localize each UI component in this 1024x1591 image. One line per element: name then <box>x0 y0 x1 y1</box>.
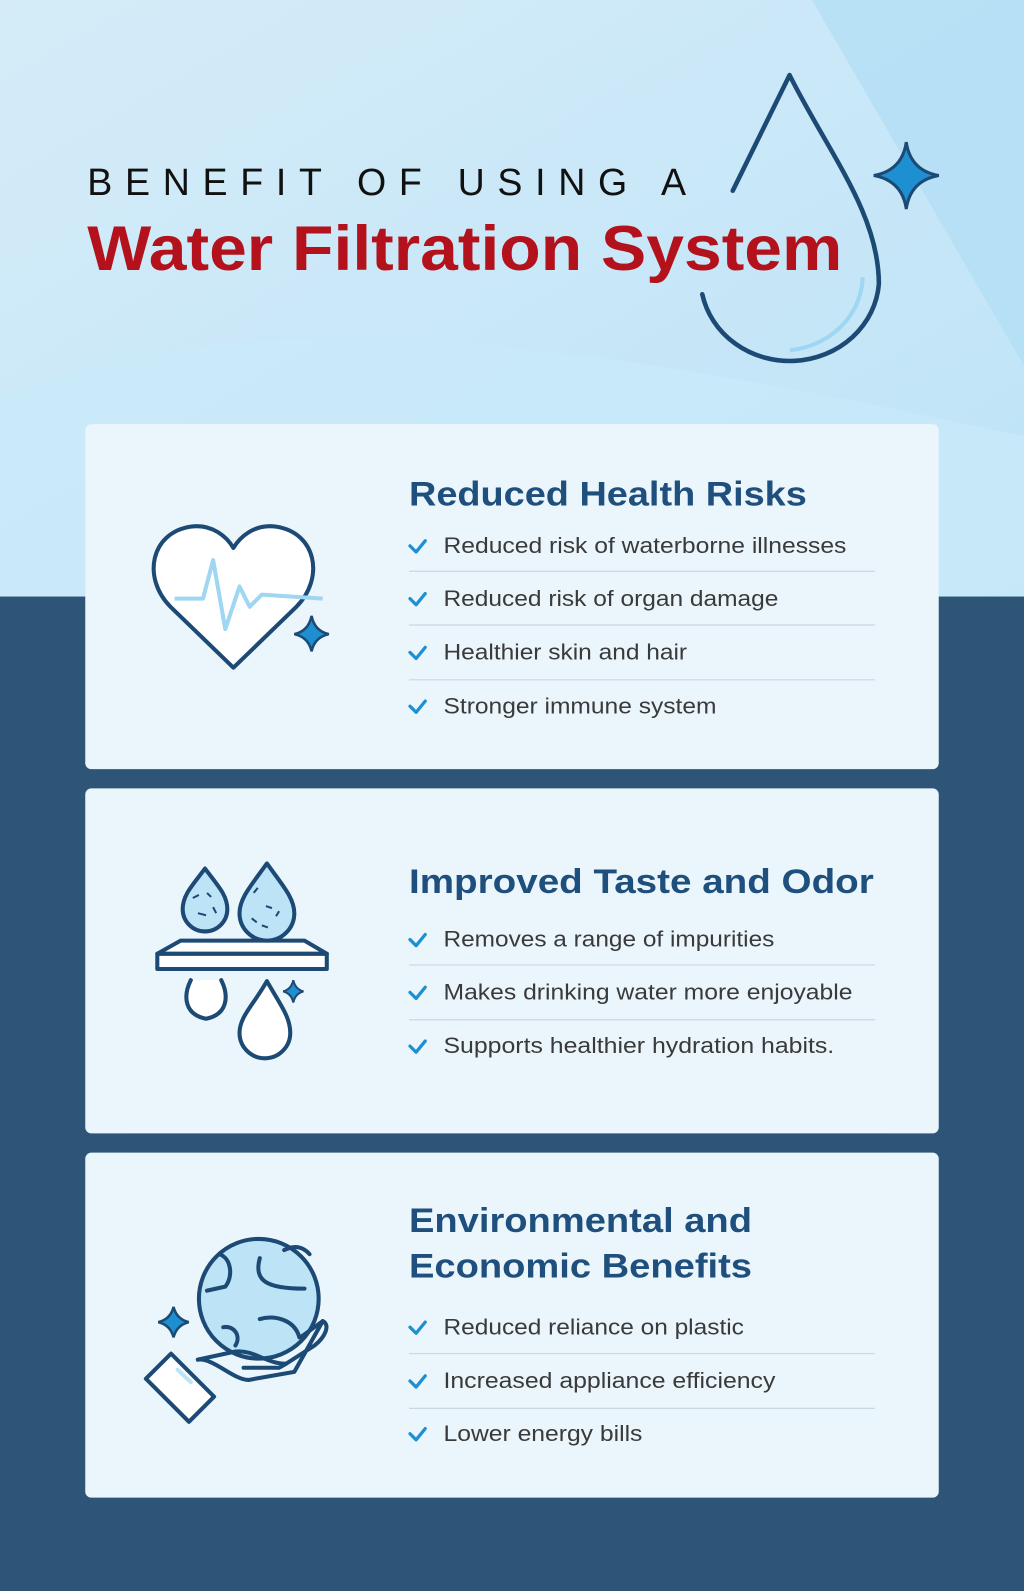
title: Water Filtration System <box>87 214 842 284</box>
list: Supports healthier hydration habits. <box>443 1033 834 1058</box>
list: Reduced risk of waterborne illnesses <box>443 533 846 558</box>
panel: taste and odor <box>85 788 939 1133</box>
icon: heart <box>154 526 329 668</box>
background top <box>0 0 1024 597</box>
panel: environmental: Economic Benefits <box>409 1247 752 1285</box>
list <box>409 927 875 1058</box>
icon: filter drops <box>157 863 327 1058</box>
panel: environmental <box>85 1153 939 1498</box>
list: Stronger immune system <box>443 693 716 718</box>
list: Removes a range of impurities <box>443 927 774 952</box>
list <box>409 1314 875 1446</box>
panel: health risks <box>85 424 939 769</box>
icon: water drop <box>702 75 939 361</box>
list: Lower energy bills <box>443 1421 643 1446</box>
list: Reduced risk of organ damage <box>443 586 778 611</box>
background bottom <box>0 597 1024 1591</box>
title: BENEFIT OF USING A <box>87 161 700 203</box>
list: Makes drinking water more enjoyable <box>443 979 852 1004</box>
heading: Reduced Health Risks <box>409 475 807 513</box>
icon: globe in hand <box>146 1239 326 1422</box>
heading: Environmental and <box>409 1202 752 1240</box>
list: Reduced reliance on plastic <box>443 1314 744 1339</box>
title <box>87 161 842 284</box>
list <box>409 533 875 718</box>
list: Healthier skin and hair <box>443 640 687 665</box>
heading: Improved Taste and Odor <box>409 863 874 901</box>
list: Increased appliance efficiency <box>443 1368 775 1393</box>
